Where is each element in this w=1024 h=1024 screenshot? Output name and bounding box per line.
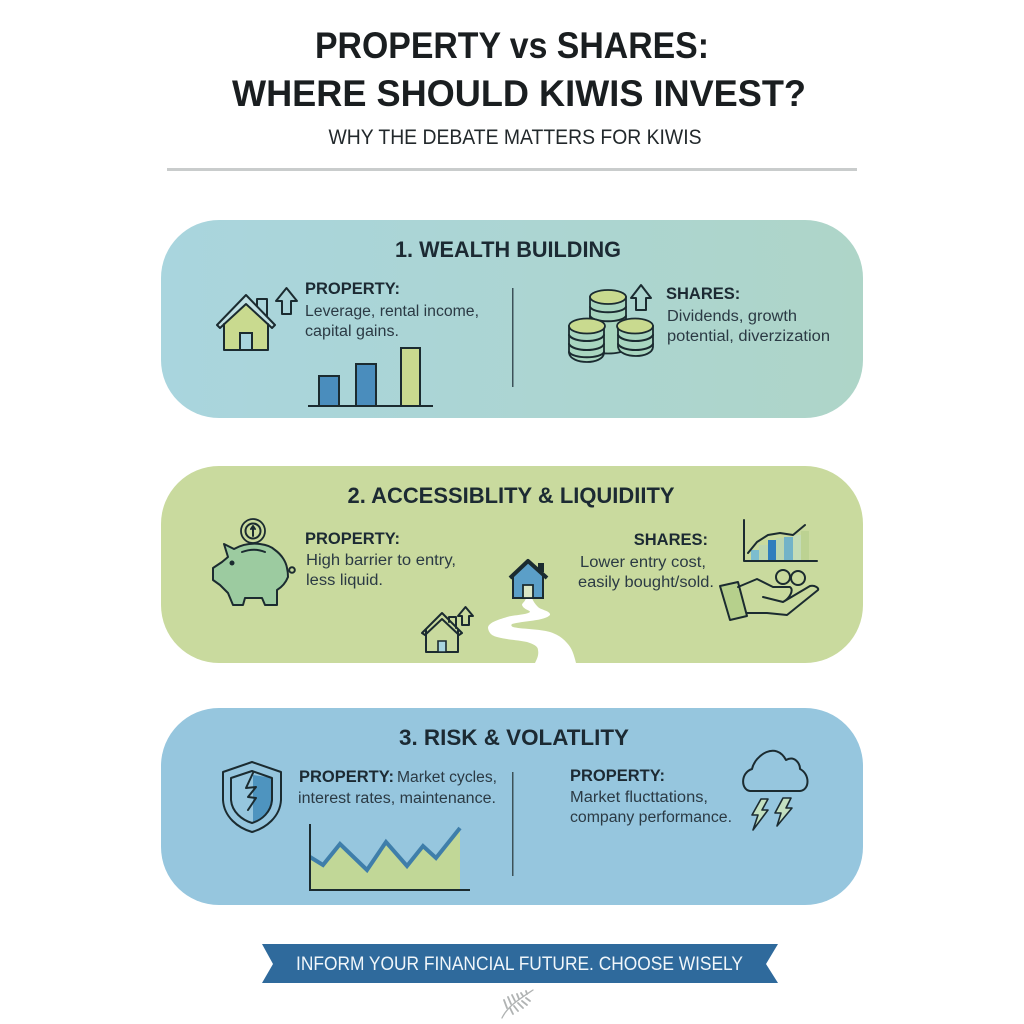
banner ribbon (262, 944, 778, 983)
text: property: Leverage, rental income, (305, 303, 479, 320)
text: property: High barrier to entry, (306, 552, 456, 569)
text: property: capital gains. (305, 323, 399, 340)
title: WHERE SHOULD KIWIS INVEST? (232, 73, 806, 114)
heading: accessibility: 2. ACCESSIBLITY & LIQUIDIITY (348, 483, 675, 508)
subtitle: WHY THE DEBATE MATTERS FOR KIWIS (328, 126, 702, 149)
icon: small house with arrow (422, 607, 473, 652)
text: shares (666, 285, 830, 345)
winding road (488, 598, 576, 663)
title: PROPERTY vs SHARES: (315, 25, 709, 66)
panel: risk and volatility (161, 708, 863, 905)
bar chart (308, 348, 433, 407)
banner ribbon: INFORM YOUR FINANCIAL FUTURE. CHOOSE WISELY (296, 954, 743, 975)
text: property: PROPERTY: (305, 530, 400, 548)
icon: shield with lightning (223, 762, 281, 832)
icon: piggy bank with coin (213, 519, 295, 605)
area chart (310, 824, 470, 890)
icon: coin stacks with arrow (569, 285, 653, 362)
text: property: PROPERTY: (299, 768, 394, 786)
icon: hand with coins (720, 570, 818, 620)
icon: storm cloud (743, 751, 808, 830)
text: shares: potential, diverzization (667, 328, 830, 345)
text: second column: company performance. (570, 809, 732, 826)
text: property: Market cycles, (397, 769, 497, 786)
text: shares: Dividends, growth (667, 308, 797, 325)
text: property: less liquid. (306, 572, 383, 589)
text: shares: easily bought/sold. (578, 574, 714, 591)
panel: accessibility and liquidity (161, 466, 863, 663)
text: property: interest rates, maintenance. (298, 790, 496, 807)
text: shares: Lower entry cost, (580, 554, 706, 571)
text: property (305, 530, 456, 589)
text: second column: Market flucttations, (570, 789, 708, 806)
icon: house with arrow (217, 288, 297, 350)
text: property (298, 768, 497, 807)
text: shares: SHARES: (666, 285, 740, 303)
icon: blue house (510, 561, 547, 598)
title (232, 25, 806, 114)
icon: silver fern (502, 990, 533, 1018)
text: shares: SHARES: (634, 531, 708, 549)
text: second column (570, 767, 732, 826)
heading: wealth building: 1. WEALTH BUILDING (395, 237, 621, 262)
icon: mini chart (744, 520, 817, 562)
text: shares (578, 531, 714, 591)
text: property (305, 280, 479, 340)
text: second column: PROPERTY: (570, 767, 665, 785)
panel: wealth building (161, 220, 863, 418)
heading: risk: 3. RISK & VOLATLITY (399, 725, 629, 750)
text: property: PROPERTY: (305, 280, 400, 298)
